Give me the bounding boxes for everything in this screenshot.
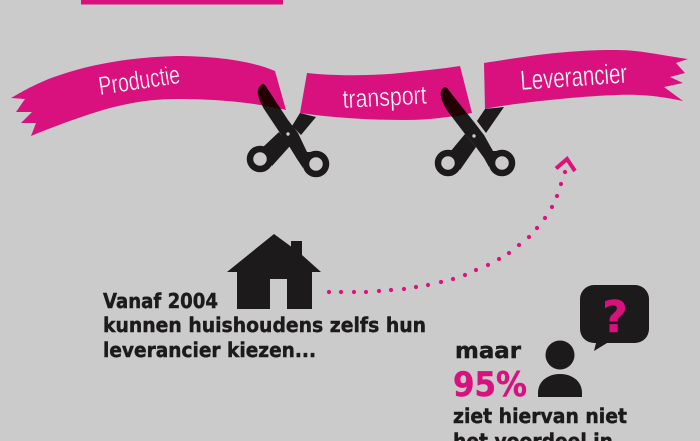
ribbon: Productie bbox=[11, 56, 286, 136]
label: transport: transport bbox=[342, 80, 428, 114]
text: see no benefit bbox=[453, 404, 627, 441]
icon: speech bubble with question mark bbox=[580, 285, 649, 351]
icon: house bbox=[227, 234, 321, 309]
icon: person bbox=[538, 340, 582, 397]
icon: speech bubble with question mark: ? bbox=[602, 292, 628, 343]
dotted arrow from house to Leverancier bbox=[327, 159, 575, 294]
stat: 95%: 95% bbox=[453, 365, 527, 405]
label: Productie: Productie bbox=[96, 59, 182, 101]
text: maar: maar bbox=[455, 339, 521, 364]
text: households can choose: leverancier kiezen... bbox=[103, 338, 316, 362]
label: Leverancier: Leverancier bbox=[519, 58, 628, 96]
text: households can choose bbox=[103, 289, 426, 362]
top banner bar bbox=[81, 0, 283, 4]
icon: scissors left bbox=[250, 84, 326, 174]
text: households can choose: Vanaf 2004 bbox=[103, 289, 218, 313]
ribbon: transport bbox=[300, 66, 472, 120]
icon: scissors right bbox=[438, 87, 512, 173]
text: see no benefit: ziet hiervan niet bbox=[453, 404, 627, 428]
text: households can choose: kunnen huishoudens zelfs hun bbox=[103, 313, 426, 337]
ribbon: Leverancier bbox=[484, 50, 688, 109]
